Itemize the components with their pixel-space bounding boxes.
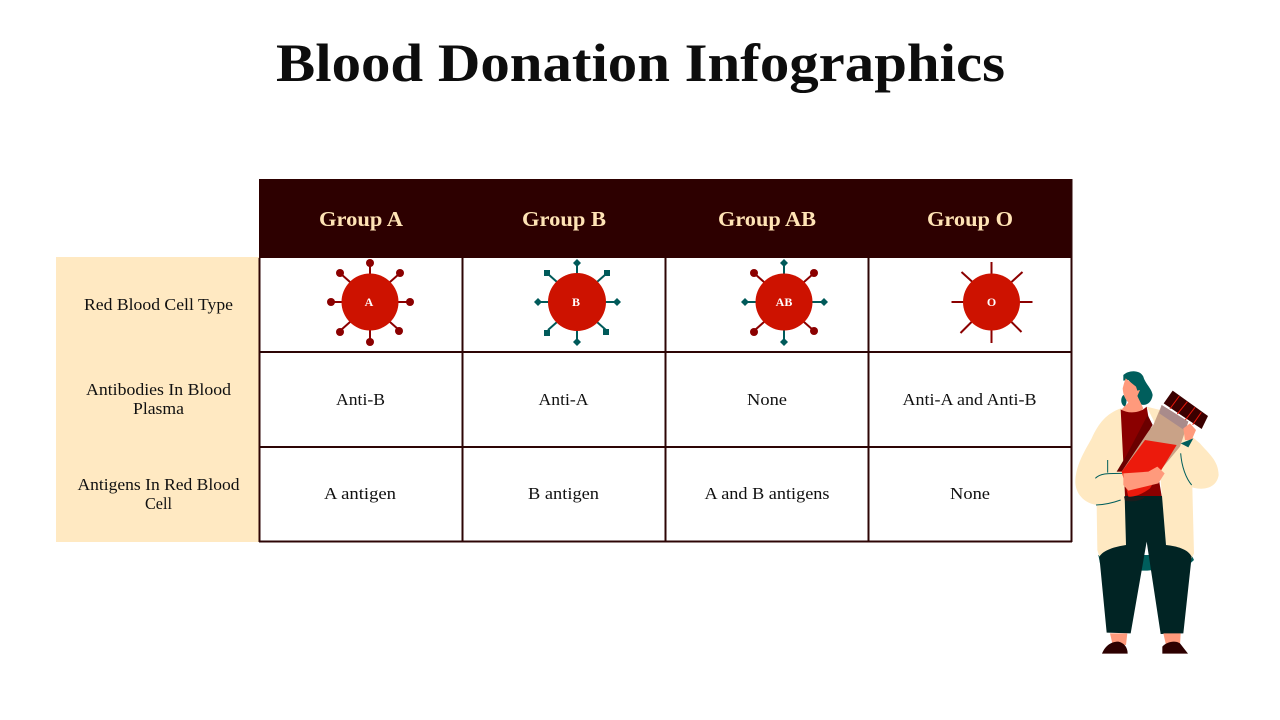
icon: cell AB (741, 259, 828, 346)
row: antibodies values: Anti-A (538, 390, 589, 409)
icon: cell O: O (987, 295, 996, 309)
header: group O: Group O (927, 207, 1013, 231)
row label: antibodies: Antibodies In Blood (86, 380, 232, 399)
row: antibodies values: Anti-A and Anti-B (902, 390, 1036, 409)
table header (259, 179, 1072, 258)
hand and forearm (1123, 467, 1165, 491)
icon: cell B: B (572, 295, 580, 309)
icon: cell A (327, 259, 414, 346)
face and neck (1122, 378, 1143, 413)
icon: cell AB: AB (776, 295, 792, 309)
coat (1075, 407, 1219, 558)
icon: cell O (952, 262, 1032, 343)
row label: antigens (78, 475, 240, 513)
row: antigens values: None (950, 484, 990, 503)
icon: cell B (534, 259, 621, 346)
table grid (259, 179, 1072, 542)
row: antigens values (324, 484, 990, 503)
coat details (1095, 453, 1192, 505)
trousers (1099, 496, 1192, 634)
clipboard (1122, 440, 1177, 497)
row label: antibodies (86, 380, 232, 418)
row label: antigens: Cell (145, 494, 172, 513)
teal lining (1098, 555, 1194, 571)
header: group AB: Group AB (718, 207, 816, 231)
illustration: woman holding blood bag (1075, 371, 1219, 654)
row: antigens values: A antigen (324, 484, 396, 503)
row: antibodies values: None (747, 390, 787, 409)
top (1121, 407, 1162, 496)
row: antibodies values (336, 390, 1036, 409)
bag shadow on top (1117, 415, 1153, 472)
header: group A: Group A (319, 207, 404, 231)
row label: antibodies: Plasma (133, 399, 184, 418)
icon: cell A: A (365, 295, 374, 309)
row: antigens values: B antigen (528, 484, 599, 503)
row: antibodies values: Anti-B (336, 390, 385, 409)
blood bag (1117, 405, 1188, 472)
header: group B: Group B (522, 207, 606, 231)
hand on bag (1183, 423, 1196, 440)
title: Blood Donation Infographics (276, 33, 1005, 93)
ankles (1110, 633, 1181, 645)
hair (1121, 371, 1153, 407)
shoes (1102, 642, 1188, 654)
panel: row labels (56, 257, 260, 542)
row: antigens values: A and B antigens (704, 484, 830, 503)
row label: red blood cell type: Red Blood Cell Type (84, 295, 233, 314)
row label: antigens: Antigens In Red Blood (78, 475, 240, 494)
waist shadow (1124, 497, 1145, 501)
